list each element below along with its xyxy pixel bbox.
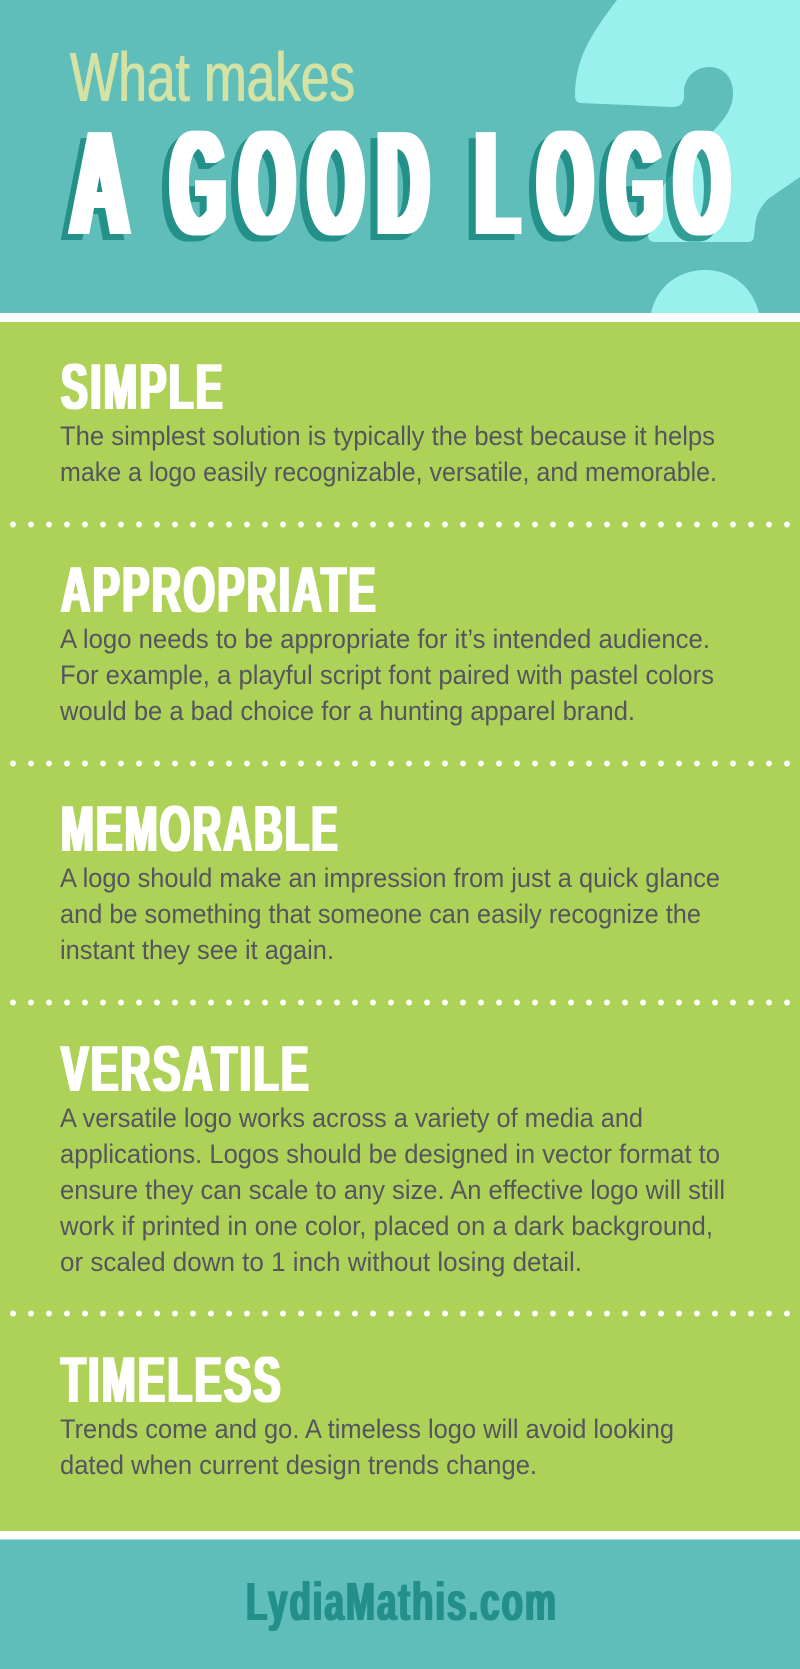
- text: memorable body: instant they see it again.: [60, 935, 334, 965]
- section: timeless: [60, 1343, 674, 1480]
- text: timeless body: Trends come and go. A timeless logo will avoid looking: [60, 1414, 674, 1444]
- title: a good logo: A: [71, 101, 128, 266]
- section: versatile: [59, 1032, 725, 1277]
- text: appropriate body: [59, 624, 714, 726]
- section: appropriate: [59, 553, 714, 726]
- text: versatile body: work if printed in one color, placed on a dark background,: [59, 1211, 713, 1241]
- text: timeless body: dated when current design trends change.: [60, 1450, 537, 1480]
- text: appropriate body: would be a bad choice for a hunting apparel brand.: [59, 696, 635, 726]
- text: versatile body: or scaled down to 1 inch without losing detail.: [60, 1247, 582, 1277]
- text: versatile body: ensure they can scale to any size. An effective logo will still: [60, 1175, 725, 1205]
- panel: main background: [0, 322, 800, 1531]
- text: versatile body: applications. Logos should be designed in vector format to: [60, 1139, 720, 1169]
- text: website: LydiaMathis.com: [246, 1572, 558, 1632]
- text: appropriate body: A logo needs to be appropriate for it’s intended audience.: [60, 624, 710, 654]
- panel: header: [0, 0, 800, 313]
- panel: footer: [0, 1540, 800, 1669]
- white band: [0, 1531, 800, 1540]
- text: memorable body: and be something that someone can easily recognize the: [60, 899, 701, 929]
- text: versatile body: [59, 1103, 725, 1277]
- section: simple: [60, 350, 717, 487]
- heading: versatile: VERSATILE: [61, 1032, 311, 1105]
- text: simple body: The simplest solution is typically the best because it helps: [60, 421, 715, 451]
- section: memorable: [60, 792, 720, 965]
- text: appropriate body: For example, a playful script font paired with pastel colors: [60, 660, 714, 690]
- text: simple body: [60, 421, 717, 487]
- heading: appropriate: APPROPRIATE: [61, 553, 378, 626]
- heading: simple: SIMPLE: [61, 350, 225, 423]
- text: timeless body: [60, 1414, 674, 1480]
- white band: [0, 313, 800, 322]
- heading: what makes: What makes: [70, 38, 355, 116]
- text: simple body: make a logo easily recognizable, versatile, and memorable.: [60, 457, 717, 487]
- icon: question mark: [575, 0, 800, 313]
- text: memorable body: [60, 863, 720, 965]
- title: a good logo: GOOD LOGO: [171, 100, 729, 266]
- text: memorable body: A logo should make an impression from just a quick glance: [60, 863, 720, 893]
- text: versatile body: A versatile logo works across a variety of media and: [60, 1103, 643, 1133]
- heading: timeless: TIMELESS: [61, 1343, 283, 1416]
- heading: memorable: MEMORABLE: [61, 792, 340, 865]
